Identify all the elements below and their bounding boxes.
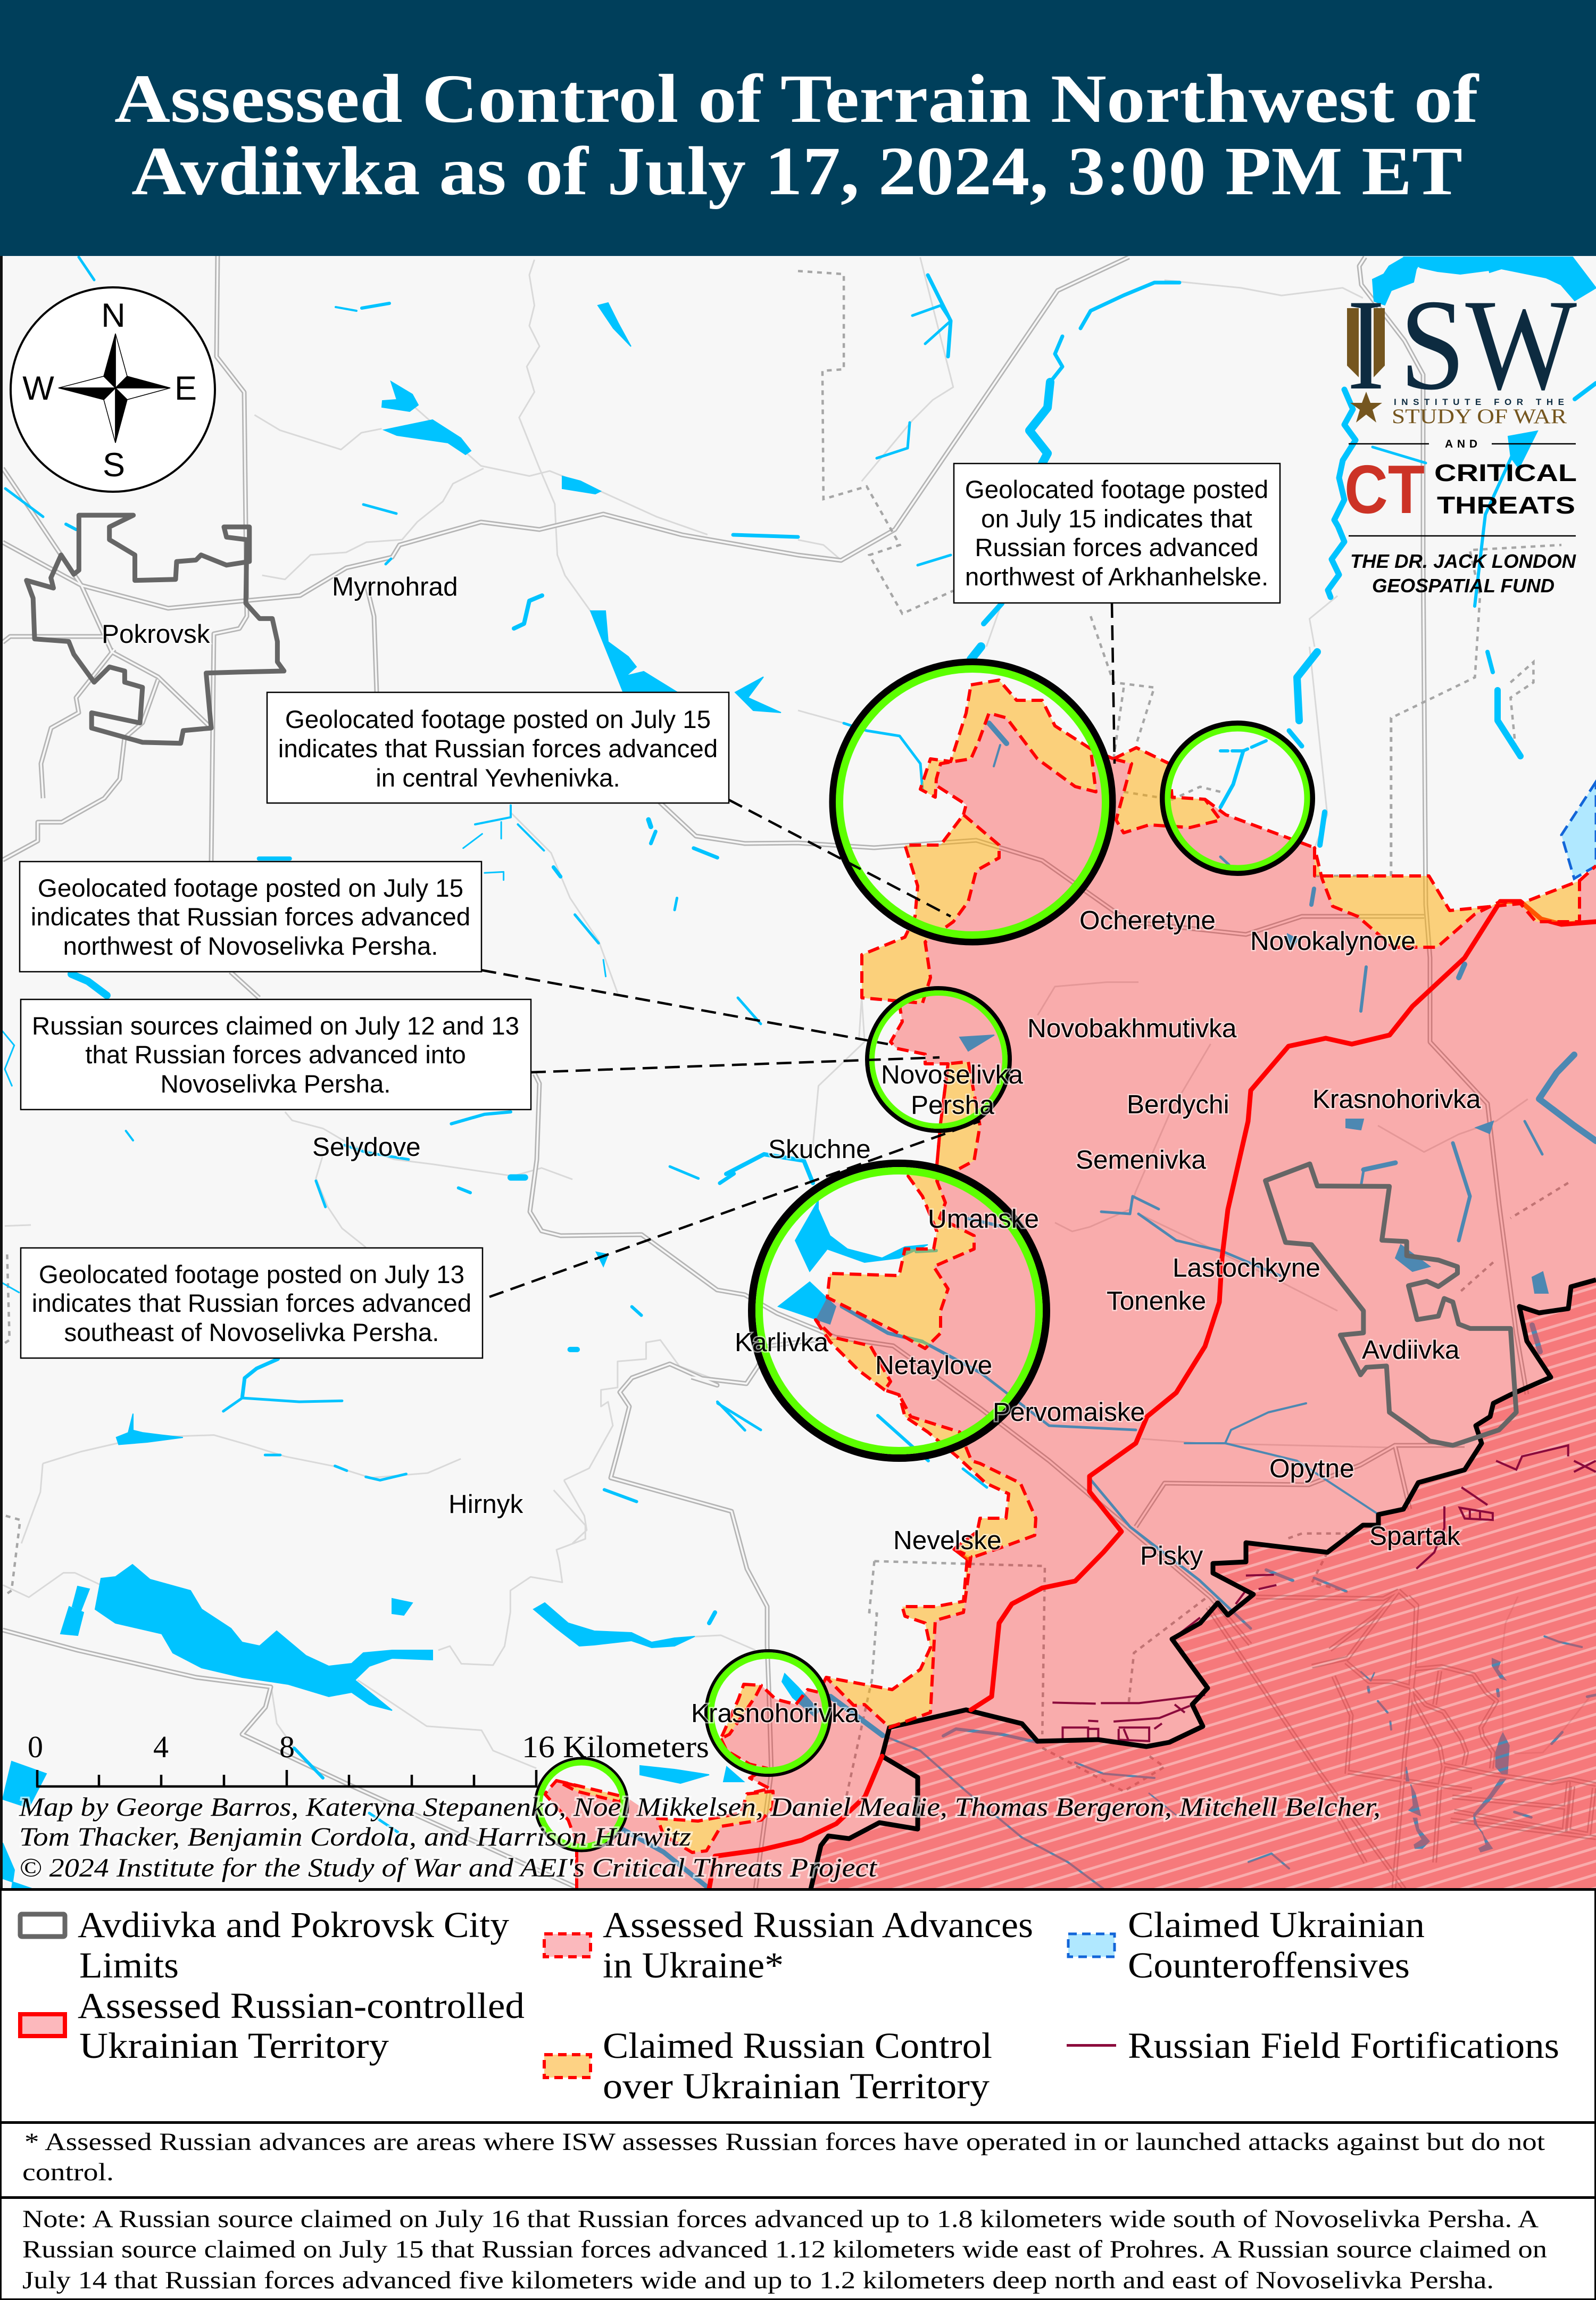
footnote bbox=[22, 2128, 1545, 2186]
callout: Yevhenivka: indicates that Russian forces advanced bbox=[278, 735, 718, 763]
place labels: Hirnyk bbox=[448, 1490, 523, 1519]
legend: field fortifications: Russian Field Fortifications bbox=[1128, 2025, 1559, 2066]
note: Note: A Russian source claimed on July 16 that Russian forces advanced up to 1.8 kilometers wide south of Novoselivka Persha. A bbox=[22, 2205, 1539, 2233]
footnote: * Assessed Russian advances are areas where ISW assesses Russian forces have operated in or launched attacks against but do not bbox=[24, 2128, 1545, 2156]
compass: W bbox=[22, 370, 54, 407]
legend: claimed Russian control: Claimed Russian Control bbox=[603, 2025, 992, 2066]
panel: map bbox=[0, 256, 1596, 1890]
callout: northwest of Novoselivka Persha: indicates that Russian forces advanced bbox=[31, 903, 470, 931]
place labels: Avdiivka bbox=[1362, 1335, 1460, 1364]
place labels: Selydove bbox=[312, 1132, 421, 1162]
footnote: control. bbox=[22, 2158, 114, 2186]
legend: Russian-controlled territory: Assessed Russian-controlled bbox=[78, 1985, 525, 2026]
rivers and reservoirs bbox=[2, 257, 1596, 1889]
scale bar: 0 bbox=[28, 1730, 43, 1764]
place labels: Persha bbox=[911, 1090, 994, 1120]
callout: northwest of Novoselivka Persha bbox=[20, 862, 481, 972]
place labels: Pokrovsk bbox=[102, 619, 210, 649]
place labels bbox=[102, 572, 1481, 1728]
ISW and Critical Threats logos: INSTITUTE FOR THE bbox=[1394, 397, 1564, 407]
place labels: Umanske bbox=[928, 1204, 1039, 1234]
compass: S bbox=[103, 446, 125, 484]
note bbox=[22, 2205, 1547, 2294]
callout: into Novoselivka Persha: that Russian forces advanced into bbox=[85, 1041, 466, 1069]
place labels: Nevelske bbox=[893, 1526, 1002, 1555]
Assessed Russian-controlled territory bbox=[545, 680, 1596, 1889]
Pokrovsk city limits bbox=[27, 515, 284, 743]
Russian field fortifications bbox=[1052, 1445, 1596, 1747]
ISW and Critical Threats logos: CT bbox=[1344, 451, 1425, 528]
legend: assessed advances: Assessed Russian Advances bbox=[603, 1905, 1033, 1945]
callout: southeast of Novoselivka Persha bbox=[21, 1248, 483, 1358]
place labels: Skuchne bbox=[768, 1135, 871, 1164]
map credits: Map by George Barros, Kateryna Stepanenko, Noel Mikkelsen, Daniel Mealie, Thomas Bergeron, Mitchell Belcher, bbox=[19, 1792, 1381, 1822]
place labels: Karlivka bbox=[735, 1328, 829, 1357]
ISW and Critical Threats logos: CRITICAL bbox=[1434, 459, 1577, 486]
title banner: Assessed Control of Terrain Northwest of bbox=[114, 61, 1479, 137]
map credits: © 2024 Institute for the Study of War and AEI's Critical Threats Project bbox=[19, 1852, 877, 1882]
legend: Russian-controlled territory: Ukrainian Territory bbox=[79, 2025, 389, 2066]
compass: N bbox=[101, 297, 126, 334]
place labels: Ocheretyne bbox=[1079, 906, 1216, 935]
ISW and Critical Threats logos: SW bbox=[1400, 272, 1577, 417]
place labels: Lastochkyne bbox=[1173, 1253, 1320, 1283]
callout: southeast of Novoselivka Persha: indicates that Russian forces advanced bbox=[32, 1289, 471, 1318]
top-right reservoir bbox=[1373, 257, 1596, 305]
scale bar bbox=[28, 1730, 709, 1786]
compass bbox=[11, 287, 215, 492]
legend: Ukrainian counteroffensives bbox=[1068, 1905, 1425, 1985]
front line of pre-2022 occupation bbox=[811, 1280, 1596, 1889]
map left border bbox=[0, 256, 3, 1889]
callout: into Novoselivka Persha: Russian sources claimed on July 12 and 13 bbox=[32, 1012, 519, 1040]
callout: Arkhanhelske: on July 15 indicates that bbox=[981, 505, 1252, 533]
ISW and Critical Threats logos: AND bbox=[1445, 438, 1477, 450]
place labels: Tonenke bbox=[1107, 1286, 1206, 1316]
legend: assessed advances bbox=[544, 1905, 1033, 1985]
compass: E bbox=[174, 370, 197, 407]
place labels: Semenivka bbox=[1076, 1145, 1206, 1174]
callout: Yevhenivka bbox=[267, 692, 729, 803]
place labels: Novokalynove bbox=[1250, 926, 1416, 956]
scale bar: 4 bbox=[153, 1730, 169, 1764]
scale bar: 8 bbox=[279, 1730, 295, 1764]
legend: city limits: Limits bbox=[79, 1945, 179, 1985]
place labels: Pisky bbox=[1140, 1541, 1203, 1570]
place labels: Opytne bbox=[1269, 1454, 1354, 1483]
legend: claimed Russian control: over Ukrainian Territory bbox=[603, 2066, 990, 2106]
callout: southeast of Novoselivka Persha: Geolocated footage posted on July 13 bbox=[39, 1261, 464, 1289]
Claimed Ukrainian counteroffensive area bbox=[1561, 782, 1596, 879]
place labels: Novobakhmutivka bbox=[1027, 1014, 1237, 1043]
ISW and Critical Threats logos: I bbox=[1347, 272, 1385, 417]
callout: northwest of Novoselivka Persha: northwest of Novoselivka Persha. bbox=[63, 932, 438, 961]
callout: Arkhanhelske: northwest of Arkhanhelske. bbox=[965, 563, 1268, 591]
legend: Russian-controlled territory bbox=[20, 1985, 525, 2066]
minor roads bbox=[3, 257, 1591, 1768]
note: Russian source claimed on July 15 that Russian forces advanced 1.12 kilometers wide east of Prohres. A Russian source claimed on bbox=[22, 2236, 1547, 2263]
claimed Russian control areas bbox=[556, 680, 1580, 1852]
Pre-2022 occupied territory hatching bbox=[811, 1280, 1596, 1889]
note: July 14 that Russian forces advanced five kilometers wide and up to 1.2 kilometers deep north and east of Novoselivka Persha. bbox=[22, 2266, 1494, 2294]
callout: northwest of Novoselivka Persha: Geolocated footage posted on July 15 bbox=[38, 874, 463, 903]
callout: into Novoselivka Persha: Novoselivka Persha. bbox=[161, 1070, 390, 1098]
callout: Arkhanhelske: Russian forces advanced bbox=[975, 534, 1259, 562]
callout: Yevhenivka: Geolocated footage posted on July 15 bbox=[285, 706, 711, 734]
assessed Russian control line bbox=[577, 901, 1596, 1889]
ISW and Critical Threats logos: GEOSPATIAL FUND bbox=[1372, 575, 1555, 597]
legend: Ukrainian counteroffensives: Claimed Ukrainian bbox=[1128, 1905, 1425, 1945]
legend: Ukrainian counteroffensives: Counteroffensives bbox=[1128, 1945, 1410, 1985]
callout: Arkhanhelske: Geolocated footage posted bbox=[965, 476, 1268, 504]
place labels: Krasnohorivka bbox=[1312, 1085, 1481, 1114]
legend: city limits: Avdiivka and Pokrovsk City bbox=[78, 1905, 510, 1945]
legend: city limits bbox=[20, 1905, 510, 1985]
callout: Yevhenivka: in central Yevhenivka. bbox=[376, 764, 620, 792]
Avdiivka city limits bbox=[1266, 1164, 1516, 1445]
major roads bbox=[3, 256, 1596, 1889]
callout leader lines bbox=[481, 603, 1115, 1297]
place labels: Spartak bbox=[1369, 1521, 1460, 1551]
title banner: Avdiivka as of July 17, 2024, 3:00 PM ET bbox=[131, 133, 1462, 210]
legend panel bbox=[1, 1890, 1595, 2122]
callout: southeast of Novoselivka Persha: southeast of Novoselivka Persha. bbox=[64, 1319, 439, 1347]
callout: Arkhanhelske bbox=[954, 464, 1280, 603]
assessed Russian advance boundary bbox=[545, 749, 1596, 1843]
title banner bbox=[0, 0, 1596, 256]
place labels: Krasnohorivka bbox=[691, 1699, 860, 1728]
map credits: Tom Thacker, Benjamin Cordola, and Harrison Hurwitz bbox=[19, 1822, 691, 1851]
ISW and Critical Threats logos bbox=[1344, 272, 1577, 597]
legend: claimed Russian control bbox=[544, 2025, 992, 2106]
ISW and Critical Threats logos: THE DR. JACK LONDON bbox=[1350, 550, 1576, 572]
legend: assessed advances: in Ukraine* bbox=[603, 1945, 784, 1985]
place labels: Berdychi bbox=[1127, 1090, 1229, 1119]
highlight circles bbox=[535, 662, 1312, 1851]
place labels: Myrnohrad bbox=[332, 572, 458, 601]
ISW and Critical Threats logos: THREATS bbox=[1437, 492, 1575, 519]
place labels: Novoselivka bbox=[881, 1060, 1023, 1089]
callout: into Novoselivka Persha bbox=[21, 999, 531, 1110]
ISW and Critical Threats logos: STUDY OF WAR bbox=[1392, 405, 1567, 428]
place labels: Netaylove bbox=[875, 1351, 992, 1380]
scale bar: 16 Kilometers bbox=[522, 1730, 709, 1764]
place labels: Pervomaiske bbox=[993, 1397, 1145, 1427]
map credits bbox=[19, 1792, 1381, 1882]
panel borders bbox=[0, 1888, 1596, 2300]
administrative boundaries bbox=[2, 271, 1568, 1797]
